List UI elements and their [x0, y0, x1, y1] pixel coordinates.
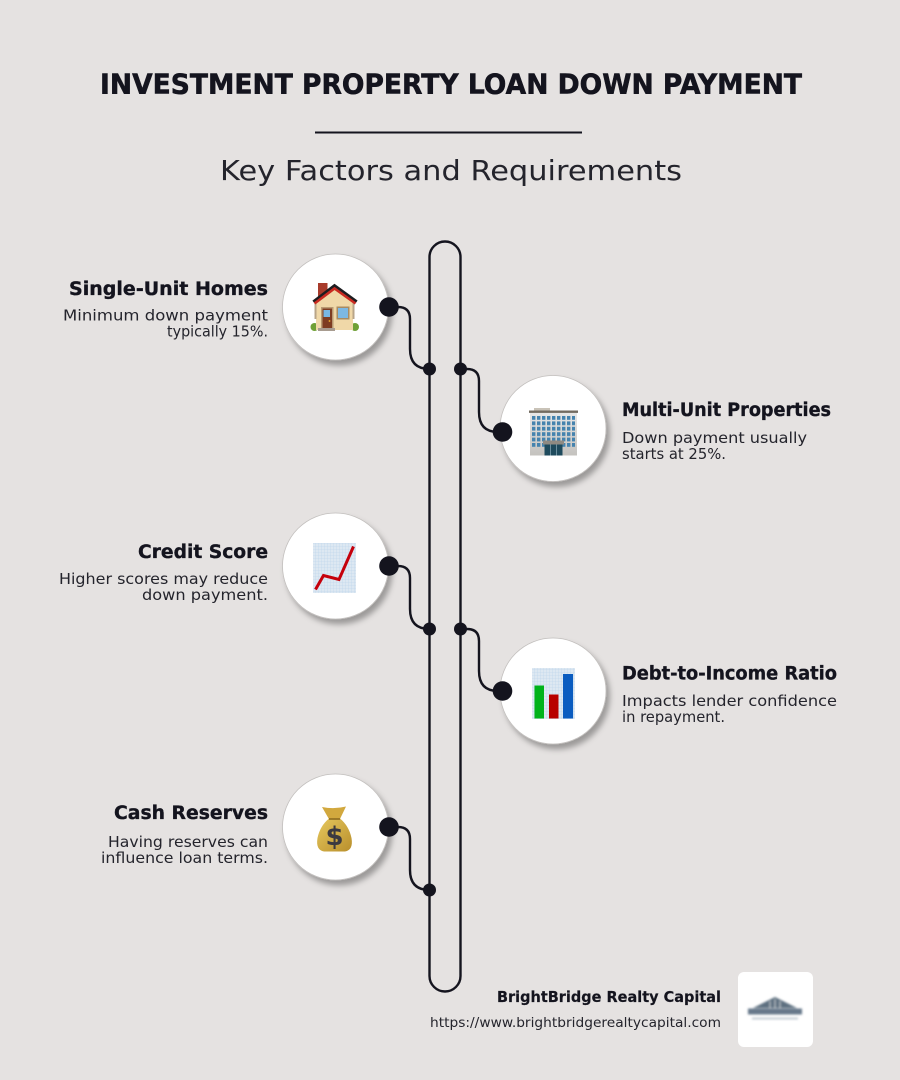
connector: credit score — [389, 566, 430, 629]
subtitle: Key Factors and Requirements — [220, 155, 682, 187]
text: multi-unit properties: starts at 25%. — [622, 445, 726, 463]
dot: multi-unit properties — [493, 422, 512, 442]
item: debt-to-income ratio — [454, 622, 837, 744]
connector: single-unit homes — [389, 307, 430, 369]
text: cash reserves: influence loan terms. — [101, 849, 268, 867]
text: debt-to-income ratio: Impacts lender confidence — [622, 692, 837, 710]
icon: bar chart — [532, 668, 575, 719]
dot: credit score — [379, 556, 399, 576]
icon: money bag: $ — [325, 822, 344, 852]
icon: rising line chart — [313, 543, 356, 593]
text: credit score: Higher scores may reduce — [59, 570, 268, 588]
text: cash reserves: Having reserves can — [108, 833, 268, 851]
text: multi-unit properties: Down payment usually — [622, 429, 807, 447]
title: INVESTMENT PROPERTY LOAN DOWN PAYMENT — [100, 68, 802, 100]
heading: cash reserves: Cash Reserves — [114, 803, 268, 824]
circle: multi-unit properties — [500, 376, 606, 482]
item: credit score — [59, 513, 436, 636]
junction: single-unit homes — [423, 362, 436, 376]
footer company name: BrightBridge Realty Capital — [497, 988, 721, 1006]
junction: debt-to-income ratio — [454, 622, 467, 636]
dot: cash reserves — [379, 817, 399, 837]
text: single-unit homes: Minimum down payment — [63, 306, 268, 324]
icon: house — [310, 283, 359, 331]
connector: multi-unit properties — [460, 369, 498, 432]
dot: debt-to-income ratio — [493, 681, 512, 701]
circle: single-unit homes — [282, 254, 388, 360]
junction: credit score — [423, 622, 436, 636]
heading: credit score: Credit Score — [138, 542, 268, 563]
circle: credit score — [282, 513, 388, 619]
dot: single-unit homes — [379, 297, 399, 317]
circle: cash reserves — [282, 774, 388, 880]
central capsule timeline — [430, 242, 460, 992]
heading: single-unit homes: Single-Unit Homes — [69, 279, 268, 300]
circle: debt-to-income ratio — [500, 638, 606, 744]
item: single-unit homes — [63, 254, 436, 376]
text: single-unit homes: typically 15%. — [167, 322, 268, 340]
junction: cash reserves — [423, 884, 436, 896]
junction: multi-unit properties — [454, 362, 467, 376]
icon: money bag — [317, 806, 352, 852]
connector: debt-to-income ratio — [460, 629, 498, 691]
connector: cash reserves — [389, 827, 430, 890]
item: cash reserves — [101, 774, 436, 896]
heading: debt-to-income ratio: Debt-to-Income Ratio — [622, 664, 837, 684]
logo — [738, 972, 813, 1047]
item: multi-unit properties — [454, 362, 831, 482]
footer url: https://www.brightbridgerealtycapital.com — [430, 1015, 721, 1031]
text: credit score: down payment. — [142, 586, 268, 604]
text: debt-to-income ratio: in repayment. — [622, 708, 725, 726]
icon: office building — [529, 408, 578, 456]
heading: multi-unit properties: Multi-Unit Properties — [622, 400, 831, 421]
